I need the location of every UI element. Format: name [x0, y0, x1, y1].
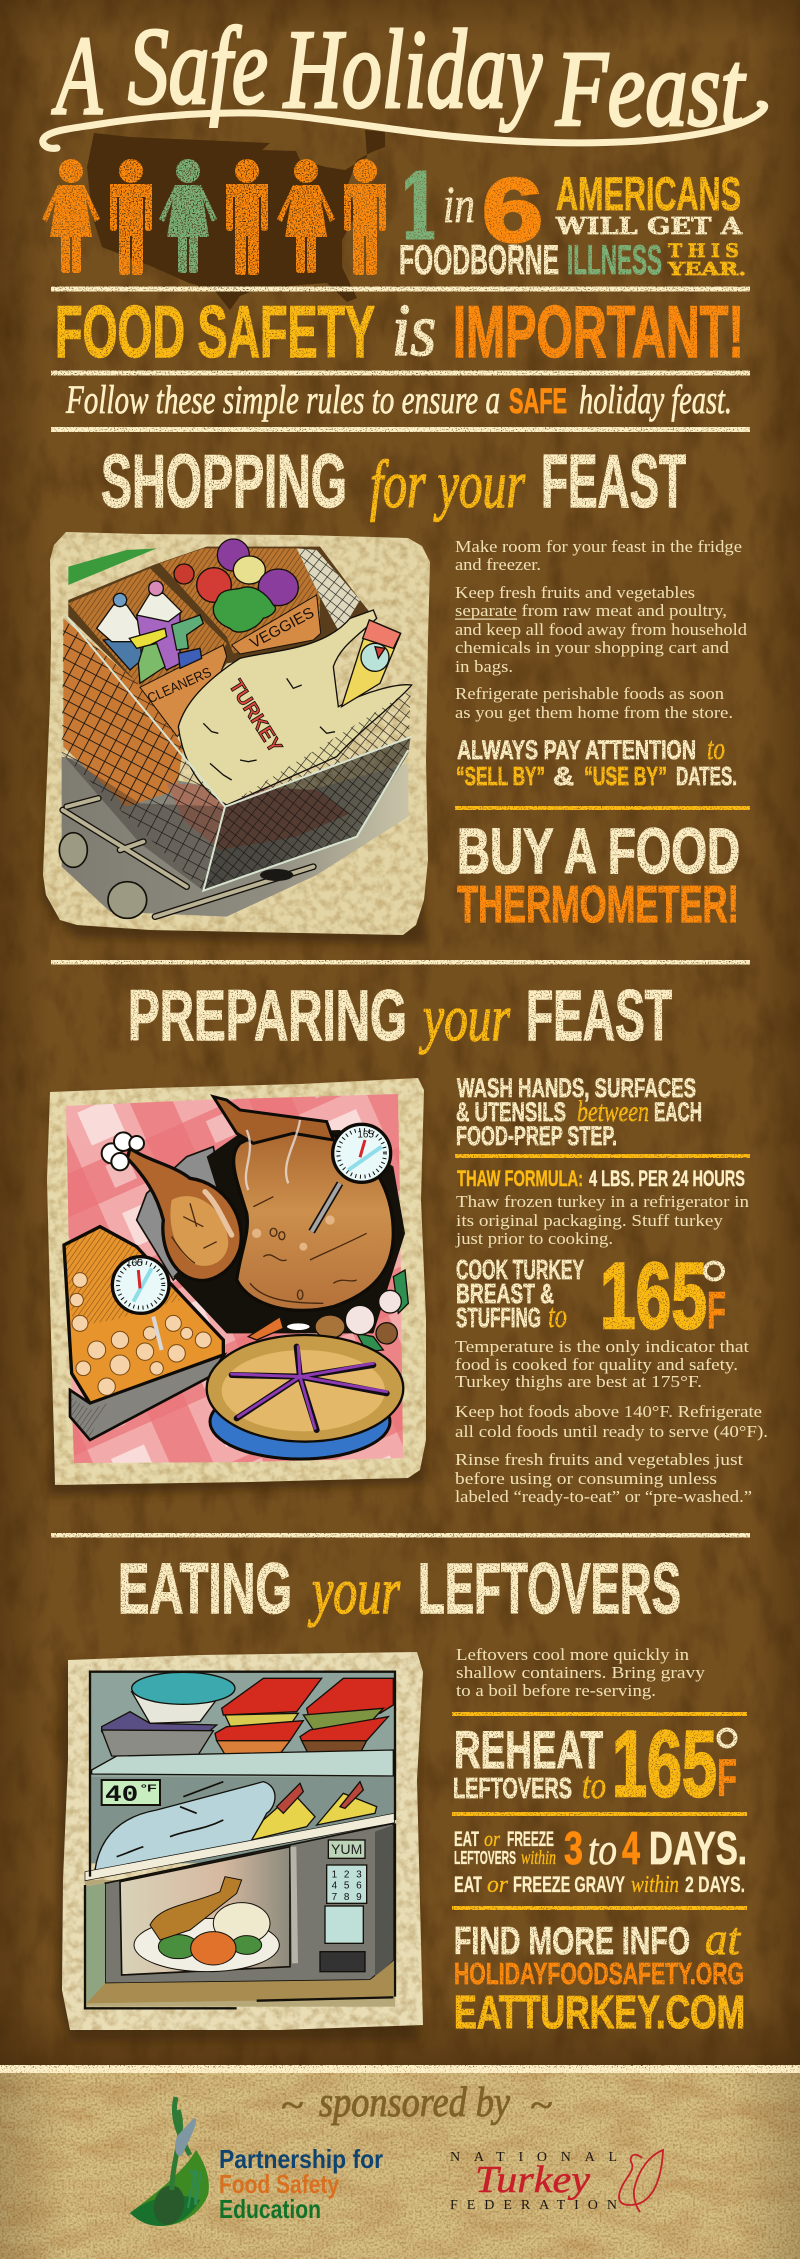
divider [51, 370, 750, 376]
icon: man [226, 159, 268, 275]
callout: reheat leftovers to 165F: F [717, 1749, 737, 1808]
callout: wash hands: EACH [654, 1097, 702, 1127]
heading: preparing your feast: your [419, 982, 510, 1055]
callout: find more info: FIND MORE INFO [454, 1920, 690, 1963]
plate of food [134, 1877, 279, 1972]
text block: thawing: just prior to cooking. [455, 1229, 613, 1248]
wheels [59, 833, 87, 867]
pie crust [207, 1335, 403, 1442]
sponsored by: ~ [281, 2087, 303, 2123]
illustration: fridge with leftovers and microwave [85, 1672, 395, 2008]
callout: sell by and use by dates: to [707, 730, 725, 766]
drumstick frill [102, 1132, 144, 1170]
thermometer in turkey [312, 1124, 391, 1232]
fridge display 40F [102, 1780, 160, 1809]
heading: preparing your feast: FEAST [526, 977, 672, 1056]
text block: leftovers: shallow containers. Bring gravy [456, 1663, 706, 1682]
text block: leftovers: Leftovers cool more quickly in [456, 1645, 689, 1664]
microwave controls: YUM [331, 1841, 362, 1857]
text block: leftovers [456, 1645, 706, 1700]
icon: leaf, spoon and fork [130, 2097, 209, 2228]
heading: eating your leftovers [118, 1550, 681, 1629]
turkey neck leg [213, 1097, 333, 1143]
title: A [51, 14, 102, 138]
paper card [43, 532, 430, 935]
cardboard side [63, 618, 183, 807]
band top edge [0, 2065, 800, 2073]
callout: wash hands: WASH HANDS, SURFACES [457, 1073, 696, 1103]
divider [51, 960, 750, 964]
callout: wash hands: FOOD-PREP STEP. [456, 1121, 617, 1151]
tablecloth [66, 1094, 403, 1463]
icon: man [110, 159, 152, 275]
title: Holiday [283, 8, 542, 132]
callout: sell by and use by dates [456, 730, 737, 791]
intro line: holiday feast. [579, 377, 732, 422]
statistic: 1 in 6 Americans will get a foodborne illness this year: WILL GET A [555, 213, 743, 240]
heading: eating your leftovers: EATING [118, 1550, 292, 1629]
fridge display 40F: 40 [105, 1783, 138, 1809]
logo: national turkey federation: Turkey [475, 2159, 590, 2201]
callout: cook turkey to 165F: 165 [600, 1243, 707, 1348]
heading: shopping for your feast: SHOPPING [101, 439, 347, 523]
divider [51, 427, 750, 432]
callout: sell by and use by dates: “USE BY” [584, 761, 667, 791]
microwave window [120, 1847, 290, 1975]
casserole [64, 1227, 223, 1403]
callout: reheat leftovers to 165F [453, 1711, 737, 1816]
text block: shopping tips: and freezer. [455, 555, 541, 574]
divider [452, 1712, 747, 1716]
heading: shopping for your feast: for your [370, 446, 525, 522]
statistic: 1 in 6 Americans will get a foodborne illness this year: FOODBORNE [399, 236, 559, 283]
logo: national turkey federation: FEDERATION [450, 2198, 617, 2213]
shelf [92, 1750, 393, 1776]
sponsored by: ~ [530, 2087, 552, 2123]
title: Safe [128, 5, 268, 127]
paper card [62, 1652, 423, 2030]
callout: eat or freeze within 3 to 4 days: within [631, 1872, 679, 1898]
shelf edge [85, 1813, 394, 1881]
text block: thawing [455, 1192, 749, 1248]
callout: sell by and use by dates: ALWAYS PAY ATTENTION [457, 735, 696, 765]
fridge frame [85, 1672, 395, 2008]
text block: temperature: before using or consuming unless [455, 1469, 717, 1488]
callout: reheat leftovers to 165F: to [582, 1765, 606, 1807]
divider [455, 1154, 750, 1158]
panel: sponsors band [0, 2065, 800, 2259]
thermometer in casserole [112, 1257, 169, 1350]
casserole dish [70, 1355, 224, 1440]
logo: national turkey federation: NATIONAL [450, 2150, 617, 2165]
thaw formula: THAW FORMULA: [457, 1166, 583, 1191]
statistic: 1 in 6 Americans will get a foodborne illness this year: ILLNESS [567, 236, 662, 283]
icon: woman highlighted in green [159, 159, 217, 273]
microwave controls [320, 1840, 367, 1972]
label: turkey: TURKEY [224, 676, 286, 757]
logo: national turkey federation [450, 2150, 663, 2213]
divider [455, 806, 750, 810]
icon: woman [42, 159, 100, 273]
callout: eat or freeze within 3 to 4 days: to [588, 1825, 617, 1874]
roasting pan behind turkey [137, 1147, 227, 1280]
microwave body [105, 1823, 393, 1983]
illustration: roast turkey, casserole and pie [64, 1097, 408, 1459]
text block: temperature: Rinse fresh fruits and vegetables just [455, 1450, 743, 1469]
intro line: Follow these simple rules to ensure a [65, 377, 500, 422]
wire at the rear [297, 548, 360, 633]
text block: shopping tips: Refrigerate perishable foods as soon [455, 684, 724, 703]
text block: leftovers: to a boil before re-serving. [456, 1681, 656, 1700]
map of the United States [87, 130, 385, 310]
callout: eat or freeze within 3 to 4 days: 2 DAYS. [685, 1872, 745, 1897]
text block: temperature [455, 1337, 768, 1506]
callout: eat or freeze within 3 to 4 days: or [484, 1826, 500, 1851]
text block: shopping tips: Keep fresh fruits and vegetables [455, 583, 695, 602]
callout: wash hands: & UTENSILS [456, 1097, 566, 1127]
title swash [43, 104, 765, 148]
thaw formula [457, 1166, 745, 1191]
label: cleaners box: CLEANERS [145, 664, 214, 706]
callout: wash hands: between [577, 1095, 649, 1128]
heading: shopping for your feast [101, 439, 686, 523]
statistic: 1 in 6 Americans will get a foodborne illness this year: YEAR. [667, 259, 746, 280]
callout: cook turkey to 165F: to [548, 1298, 567, 1335]
callout: eat or freeze within 3 to 4 days: 4 [622, 1822, 640, 1874]
butter boxes [252, 1782, 377, 1840]
callout: eat or freeze within 3 to 4 days: FREEZE [507, 1828, 554, 1851]
text block: shopping tips [455, 537, 748, 722]
callout: eat or freeze within 3 to 4 days: 3 [564, 1822, 583, 1874]
callout: sell by and use by dates: “SELL BY” [456, 761, 545, 791]
callout: find more info: at [705, 1913, 741, 1964]
cleaners: bottles [97, 581, 203, 683]
heading: eating your leftovers: your [308, 1555, 400, 1628]
logo: partnership for food safety education: Partnership for [219, 2144, 383, 2174]
text block: temperature: Turkey thighs are best at 175°F. [455, 1372, 702, 1391]
callout: cook turkey to 165F: STUFFING [456, 1302, 541, 1333]
steam [83, 1120, 300, 1353]
text block: thawing: Thaw frozen turkey in a refrigerator in [456, 1192, 749, 1211]
text block: shopping tips: chemicals in your shopping cart and [455, 638, 730, 657]
text block: shopping tips: as you get them home from the store. [455, 703, 733, 722]
panel: shopping illustration [40, 532, 430, 945]
logo: partnership for food safety education: Education [219, 2194, 321, 2224]
callout: reheat leftovers to 165F: 165 [612, 1711, 717, 1816]
text block: temperature: labeled “ready-to-eat” or “pre-washed.” [455, 1487, 752, 1506]
callout: cook turkey to 165F: F [707, 1282, 726, 1340]
text block: shopping tips: and keep all food away from household [455, 620, 748, 639]
thermometer in casserole: 165 [126, 1258, 143, 1269]
callout: cook turkey to 165F [456, 1243, 726, 1348]
callout: sell by and use by dates: DATES. [676, 761, 737, 791]
title [51, 5, 746, 149]
illustration: shopping cart [59, 539, 412, 918]
callout: eat or freeze within 3 to 4 days [454, 1822, 747, 1898]
text block: temperature: food is cooked for quality and safety. [455, 1355, 738, 1374]
callout: reheat leftovers to 165F: LEFTOVERS [453, 1773, 572, 1805]
microwave controls: 456 [332, 1881, 362, 1892]
callout: reheat leftovers to 165F: REHEAT [454, 1721, 603, 1780]
paper card [47, 1078, 426, 1485]
statistic: 1 in 6 Americans will get a foodborne illness this year: 1 [399, 154, 439, 259]
callout: cook turkey to 165F: BREAST & [456, 1278, 554, 1309]
icon: woman [277, 159, 335, 273]
statistic: 1 in 6 Americans will get a foodborne illness this year: 6 [482, 161, 543, 261]
callout: eat or freeze within 3 to 4 days: DAYS. [649, 1822, 747, 1874]
thermometer in turkey: 165 [357, 1129, 374, 1140]
pie ribbons [232, 1347, 387, 1430]
casserole [102, 1672, 393, 1761]
callout: wash hands [456, 1073, 702, 1151]
text block: shopping tips: Make room for your feast in the fridge [455, 537, 742, 556]
headline: food safety is important: is [392, 290, 436, 372]
callout: eat or freeze within 3 to 4 days: EAT [454, 1872, 482, 1897]
people icons: 1 in 6 [42, 159, 386, 275]
callout: find more info [454, 1913, 745, 2038]
icon: turkey outline [619, 2150, 663, 2212]
drumstick [127, 1148, 241, 1281]
logo: partnership for food safety education [130, 2097, 383, 2228]
divider [51, 286, 750, 292]
pie dish [210, 1384, 390, 1459]
callout: eat or freeze within 3 to 4 days: LEFTOVERS [454, 1848, 516, 1868]
fridge display 40F: °F [141, 1784, 157, 1795]
heading: shopping for your feast: FEAST [541, 439, 686, 523]
heading: preparing your feast: PREPARING [128, 977, 407, 1056]
callout: eat or freeze within 3 to 4 days: or [487, 1872, 509, 1898]
mesh panels [203, 737, 411, 891]
intro line: SAFE [509, 382, 567, 421]
microwave controls: 123 [332, 1869, 362, 1880]
statistic: 1 in 6 Americans will get a foodborne illness this year: in [443, 177, 475, 234]
text block: temperature: all cold foods until ready to serve (40°F). [455, 1422, 768, 1441]
label: veggies box: VEGGIES [247, 604, 317, 652]
frozen turkey bag [95, 1782, 275, 1870]
logo: partnership for food safety education: Food Safety [219, 2169, 339, 2199]
vegetables [174, 539, 298, 632]
callout: eat or freeze within 3 to 4 days: FREEZE GRAVY [513, 1872, 625, 1897]
divider [452, 1906, 747, 1910]
turkey body [234, 1130, 393, 1310]
garnish [248, 1270, 408, 1352]
text block: shopping tips: in bags. [455, 657, 513, 676]
turkey [178, 610, 412, 805]
callout: eat or freeze within 3 to 4 days: within [521, 1847, 556, 1869]
sponsored by: sponsored by [319, 2080, 510, 2126]
headline: food safety is important: FOOD SAFETY [55, 292, 375, 373]
callout: sell by and use by dates: & [553, 761, 574, 791]
text block: temperature: Keep hot foods above 140°F. Refrigerate [455, 1402, 762, 1421]
pink meat under turkey [167, 783, 350, 850]
divider [51, 1533, 750, 1538]
panel: leftovers illustration [56, 1652, 423, 2042]
title: Feast [555, 30, 746, 149]
callout: eat or freeze within 3 to 4 days: EAT [454, 1828, 479, 1851]
microwave controls: 789 [332, 1892, 362, 1903]
panel: preparing illustration [47, 1078, 426, 1496]
divider [452, 1812, 747, 1816]
text block: temperature: Temperature is the only indicator that [455, 1337, 749, 1356]
callout: buy a food thermometer [457, 815, 740, 934]
icon: man [344, 159, 386, 275]
text block: thawing: its original packaging. Stuff turkey [456, 1211, 724, 1230]
statistic: 1 in 6 Americans will get a foodborne illness this year [399, 154, 746, 283]
statistic: 1 in 6 Americans will get a foodborne illness this year: THIS [668, 240, 745, 262]
callout: cook turkey to 165F: COOK TURKEY [456, 1254, 584, 1285]
cart frame [63, 798, 313, 917]
text block: shopping tips: separate from raw meat and poultry, [455, 601, 727, 620]
thermometer package [342, 620, 401, 707]
